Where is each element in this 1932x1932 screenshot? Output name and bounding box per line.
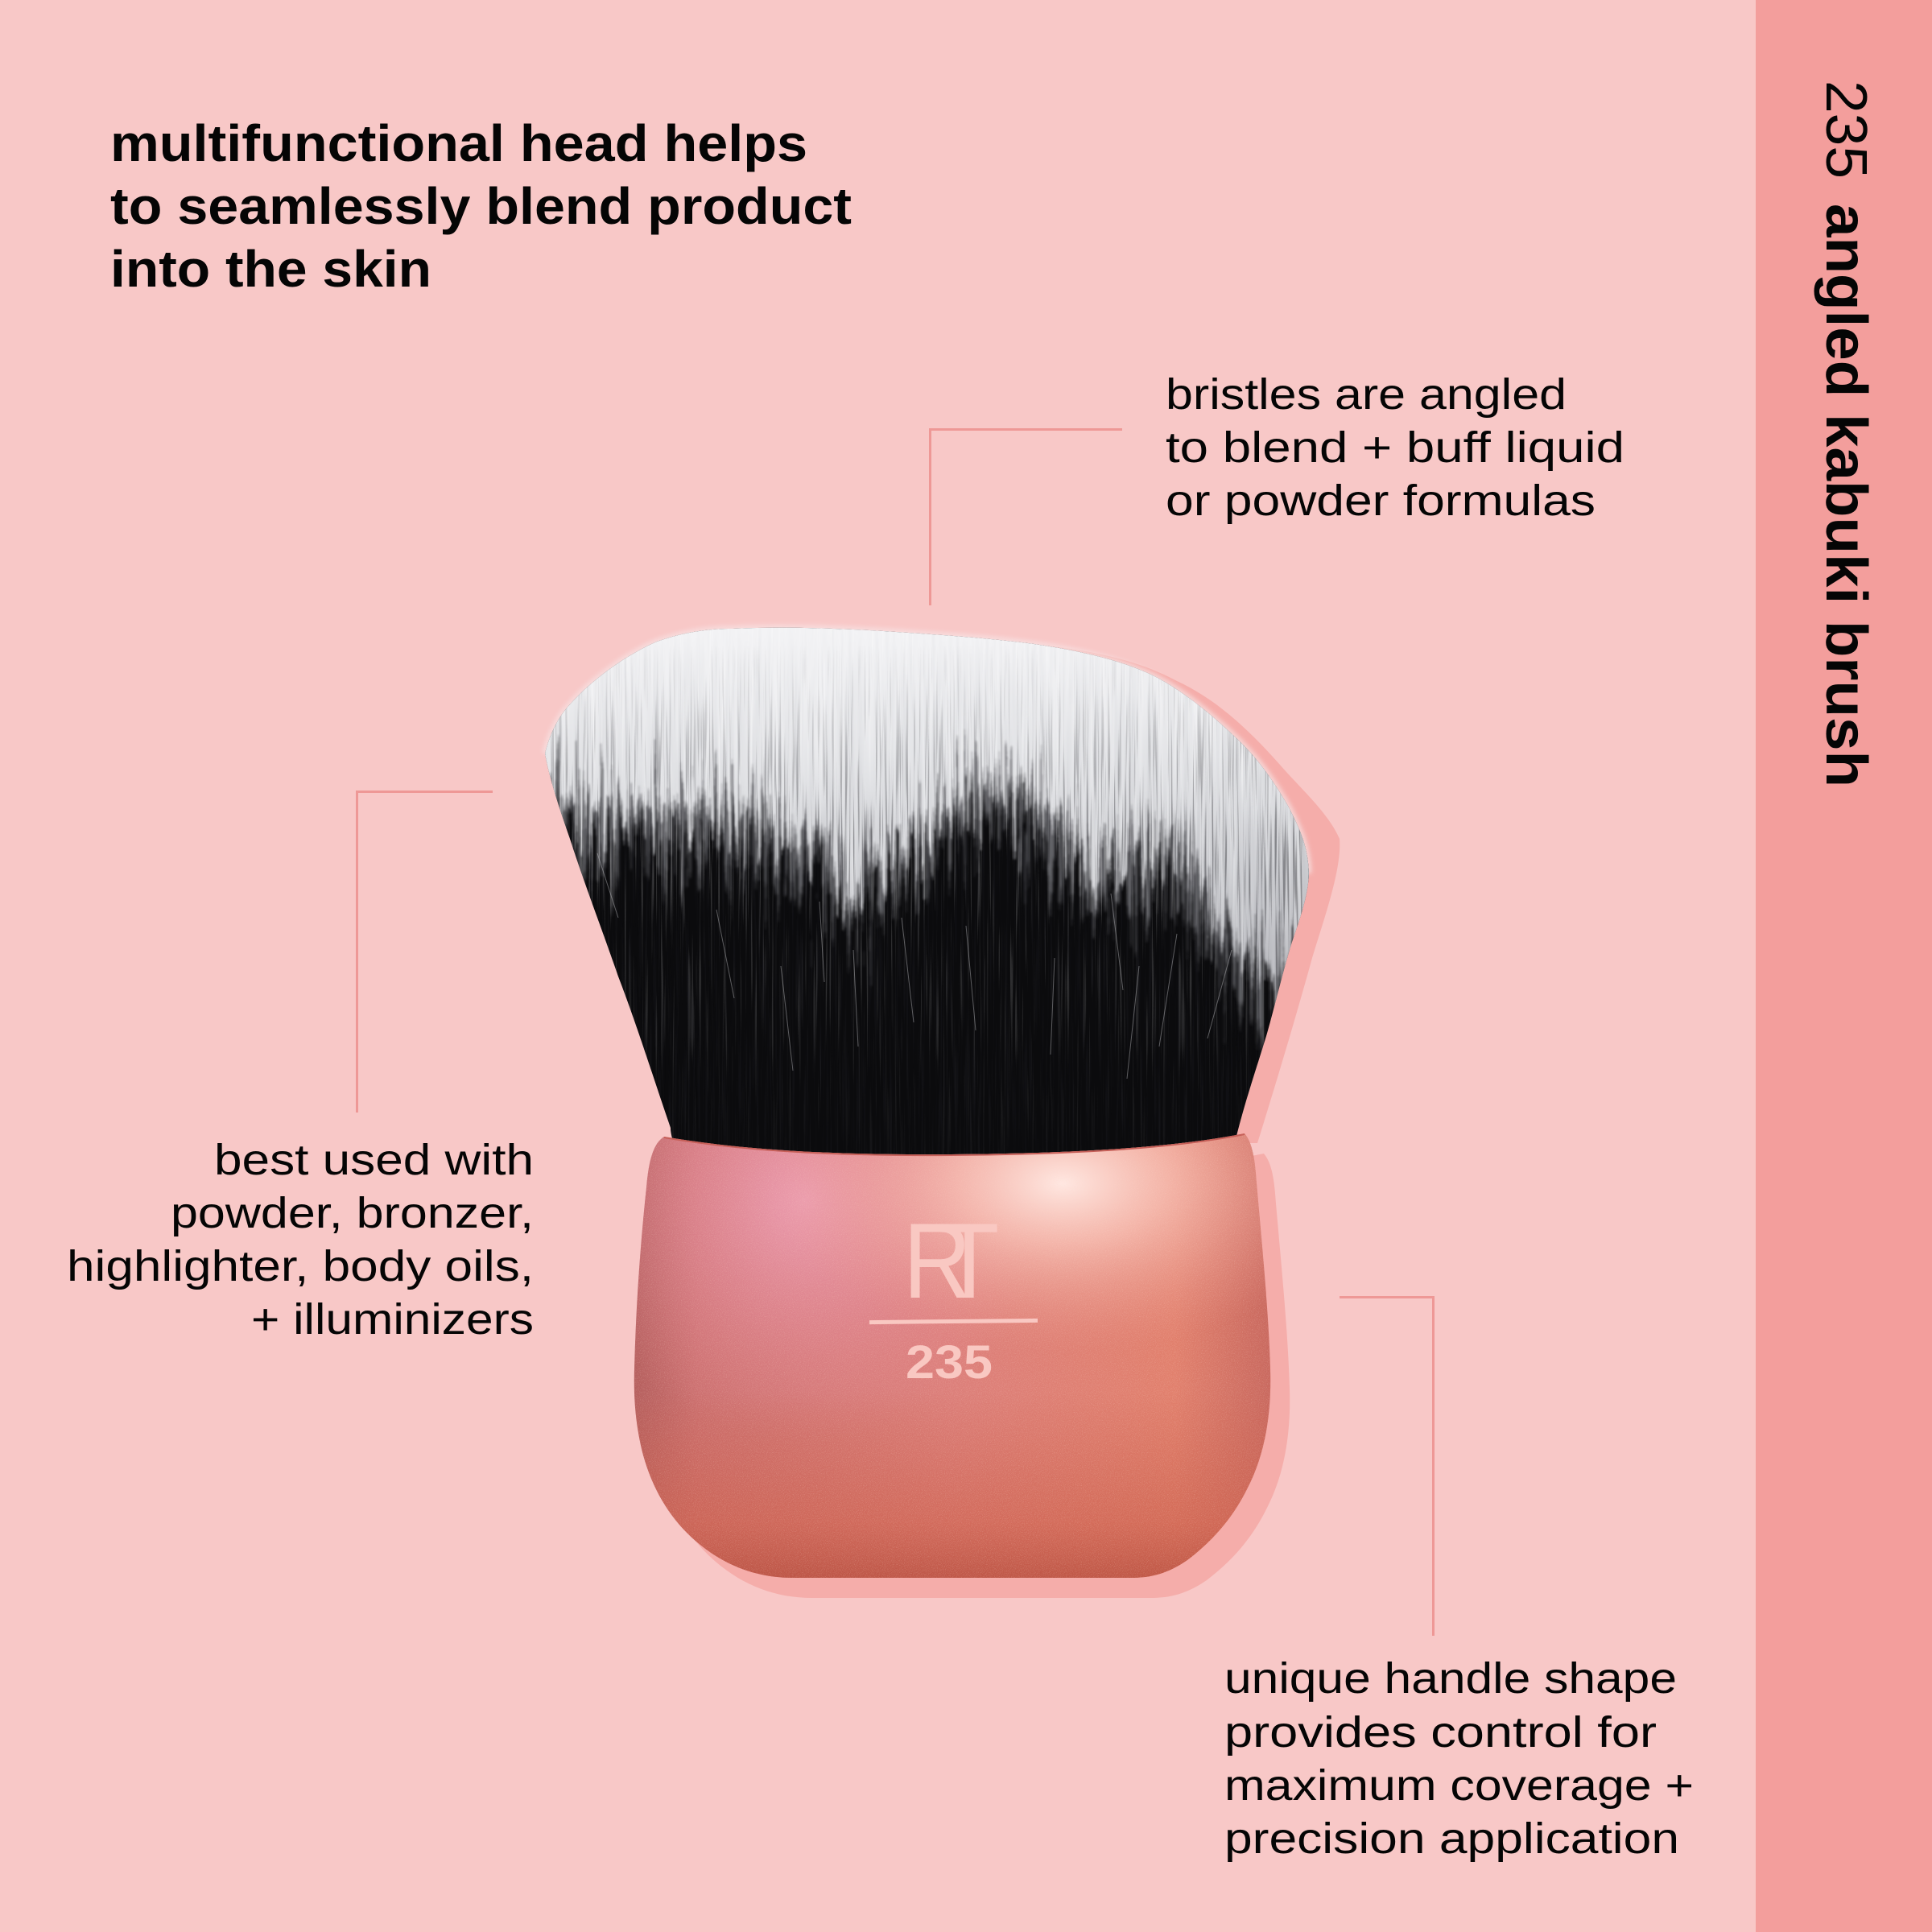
connector: best used with callout	[357, 792, 493, 1113]
product number: 235	[1814, 80, 1878, 179]
logo on handle: T	[939, 1201, 999, 1321]
callout text: bristles: bristles are angled	[1166, 370, 1567, 419]
callout text: handle: provides control for	[1224, 1708, 1657, 1757]
side panel: product name	[1756, 0, 1932, 1932]
callout text: bristles	[1166, 370, 1624, 525]
connector: handle callout	[1340, 1298, 1433, 1636]
fine light hairs	[552, 628, 1282, 1154]
callout text: handle: maximum coverage +	[1224, 1761, 1694, 1810]
callout text: best used with	[67, 1136, 534, 1344]
callout text: bristles: or powder formulas	[1166, 477, 1596, 525]
logo on handle	[869, 1201, 1038, 1389]
brush shadow	[571, 631, 1340, 1598]
title: to seamlessly blend product	[110, 177, 852, 235]
callout text: best used with: powder, bronzer,	[171, 1189, 534, 1237]
title: into the skin	[110, 240, 431, 298]
title: multifunctional head helps	[110, 114, 807, 172]
stray hair strands	[597, 853, 1232, 1079]
logo divider	[869, 1319, 1038, 1324]
callout text: best used with: best used with	[214, 1136, 534, 1184]
handle rim	[664, 1134, 1245, 1155]
callout text: handle: precision application	[1224, 1814, 1679, 1863]
brush bristles	[545, 628, 1309, 1154]
callout text: handle	[1224, 1654, 1694, 1863]
handle metallic grain	[628, 1127, 1280, 1586]
callout text: handle: unique handle shape	[1224, 1654, 1677, 1703]
handle number: 235	[906, 1336, 993, 1389]
product name: angled kabuki brush	[1814, 204, 1878, 787]
grey transition hairs	[545, 628, 1309, 1053]
brush handle	[634, 1133, 1270, 1578]
white bristle tips	[545, 628, 1309, 1006]
fine dark hairs	[545, 662, 1309, 1134]
connector: bristles callout	[931, 430, 1122, 605]
bristle edge halo	[545, 628, 1309, 873]
handle base shading	[640, 1428, 1261, 1578]
callout text: best used with: highlighter, body oils,	[67, 1242, 534, 1290]
title	[110, 114, 852, 298]
logo on handle: R	[903, 1201, 972, 1321]
callout text: bristles: to blend + buff liquid	[1166, 423, 1624, 472]
callout text: best used with: + illuminizers	[251, 1295, 534, 1344]
handle lilac sheen	[636, 1137, 944, 1389]
handle highlight	[840, 1133, 1264, 1320]
